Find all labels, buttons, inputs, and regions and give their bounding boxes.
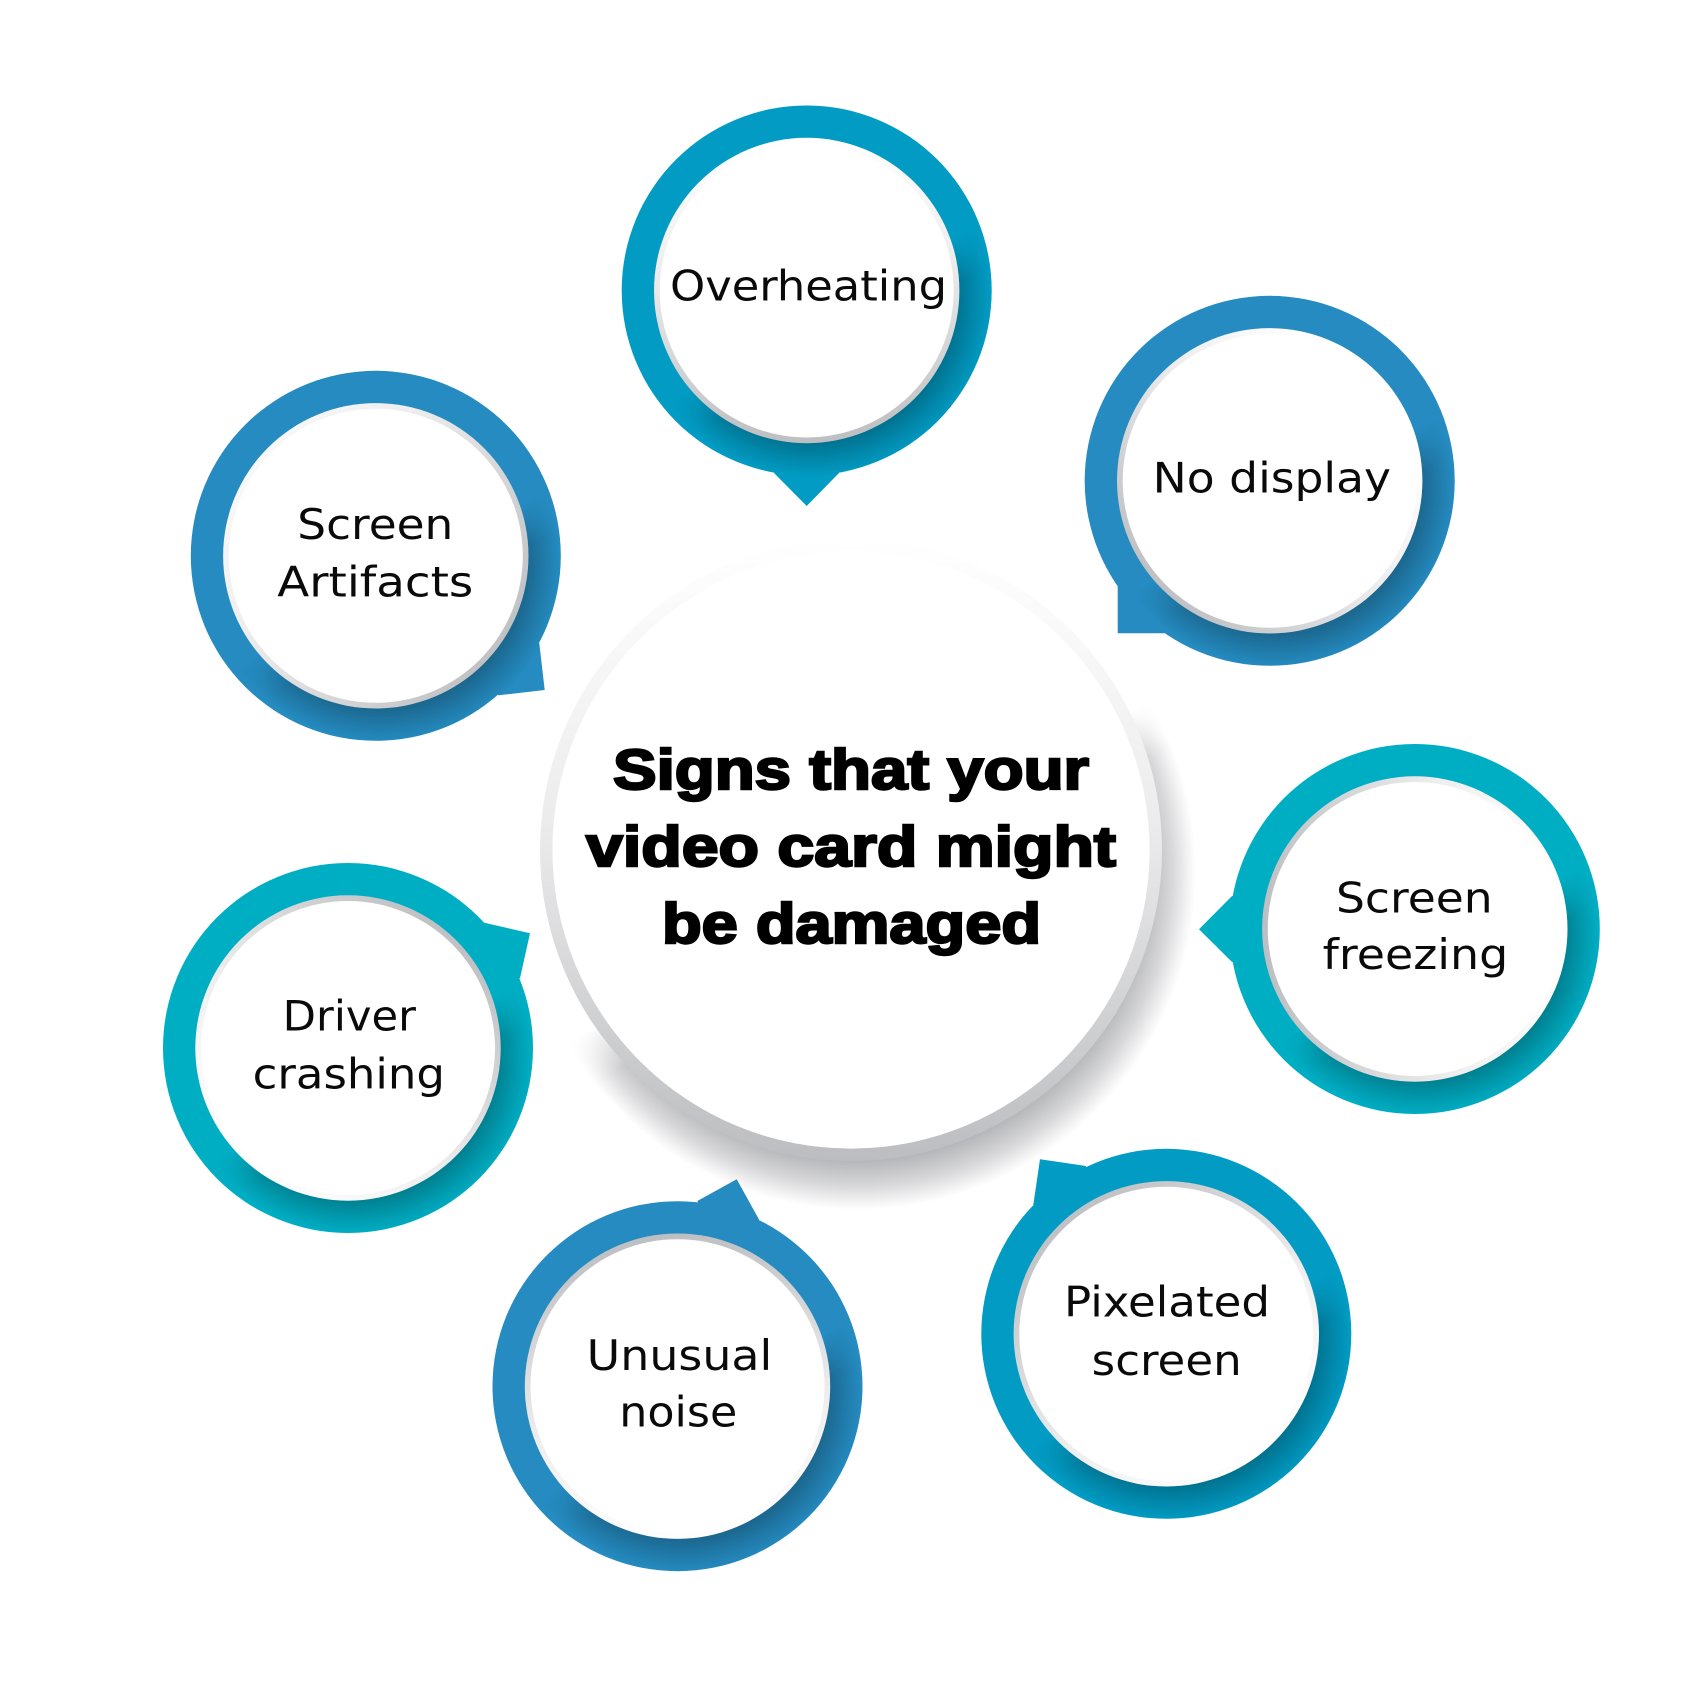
pointer tail — [697, 1179, 759, 1240]
ring shadow — [232, 1004, 526, 1228]
ring — [981, 1149, 1351, 1519]
label: screen — [1092, 1336, 1242, 1385]
pointer tail — [480, 640, 545, 695]
label: Unusual — [587, 1331, 772, 1380]
central title — [586, 738, 1116, 956]
bubble: Overheating — [622, 106, 992, 506]
central circle white face — [552, 551, 1150, 1149]
label: Screen — [297, 500, 453, 549]
white face — [660, 144, 954, 438]
ring shadow — [1154, 438, 1448, 661]
ring shadow — [1051, 1290, 1344, 1514]
label: noise — [619, 1388, 737, 1437]
central circle bevel — [540, 539, 1162, 1161]
label — [1064, 1278, 1270, 1385]
bevel — [195, 895, 501, 1201]
label: Overheating — [670, 262, 947, 311]
label: Driver — [283, 992, 417, 1041]
ring shadow — [691, 247, 985, 471]
label: Artifacts — [277, 558, 473, 607]
ring — [1085, 296, 1455, 666]
pointer tail — [1033, 1159, 1086, 1220]
ring shadow — [260, 512, 554, 736]
bubble: Pixelated screen — [981, 1149, 1351, 1520]
label: Pixelated — [1064, 1278, 1270, 1327]
bevel — [654, 138, 959, 443]
central title: video card might — [586, 815, 1116, 879]
pointer tail — [1118, 586, 1220, 633]
bevel — [1014, 1181, 1319, 1487]
label: No display — [1153, 454, 1391, 503]
central circle: Signs that your video card might be damaged — [540, 657, 1190, 1204]
pointer tail — [1199, 896, 1260, 962]
ring shadow — [1300, 886, 1593, 1110]
bevel — [1262, 776, 1568, 1082]
central title: be damaged — [662, 892, 1041, 956]
ring — [622, 106, 992, 476]
label: crashing — [253, 1050, 445, 1099]
central title: Signs that your — [613, 738, 1089, 802]
ring — [163, 863, 533, 1233]
bevel — [525, 1234, 830, 1539]
white face — [201, 901, 495, 1195]
pointer tail — [470, 923, 530, 978]
bubble: Screen Artifacts — [191, 371, 561, 742]
white face — [1268, 782, 1562, 1076]
bevel — [223, 403, 529, 708]
ring — [492, 1201, 862, 1571]
label — [587, 1331, 772, 1437]
bubble: Screen freezing — [1199, 744, 1600, 1115]
ring — [191, 371, 561, 741]
pointer tail — [774, 440, 839, 506]
label — [277, 500, 473, 607]
bevel — [1117, 328, 1422, 634]
white face — [229, 409, 523, 703]
ring shadow — [562, 1342, 856, 1566]
label — [1323, 873, 1508, 979]
label: freezing — [1323, 930, 1508, 979]
label — [253, 992, 445, 1099]
central circle drop shadow — [588, 722, 1190, 1204]
white face — [1123, 334, 1417, 628]
white face — [1019, 1187, 1313, 1481]
label: Screen — [1336, 873, 1493, 922]
ring — [1230, 744, 1600, 1114]
bubble: Driver crashing — [163, 863, 533, 1234]
white face — [530, 1239, 824, 1533]
bubble: Unusual noise — [492, 1179, 862, 1572]
bubble: No display — [1085, 296, 1455, 667]
